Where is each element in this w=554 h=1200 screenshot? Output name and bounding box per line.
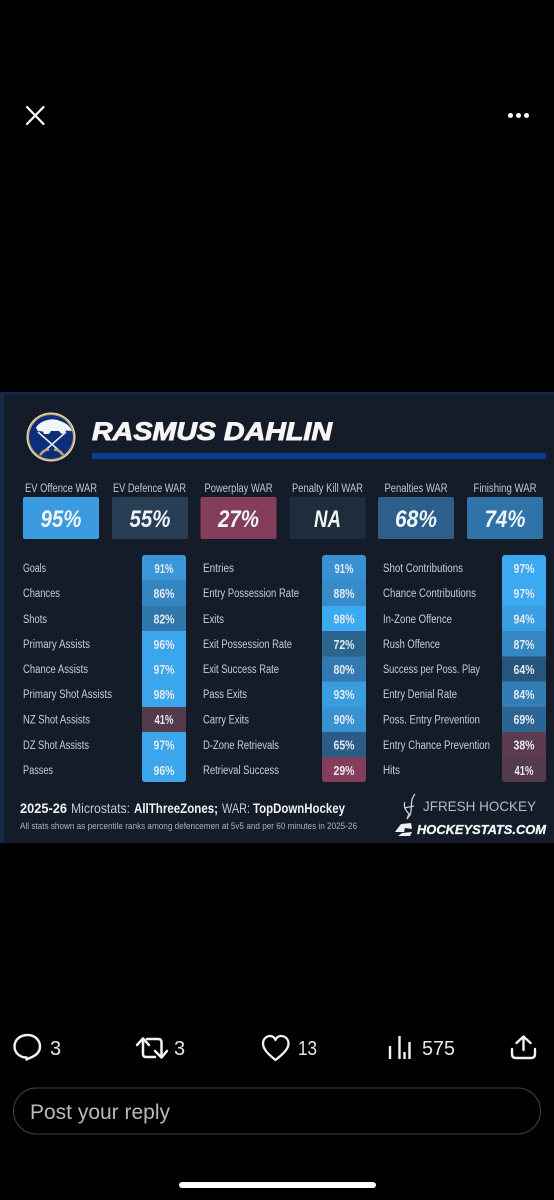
Penalty Kill WAR [290, 483, 366, 539]
stats column 2: Exits [203, 614, 224, 626]
stats column 1: Chances [23, 588, 60, 600]
EV Defence WAR: EV Defence WAR [113, 483, 186, 495]
stats column 3: Chance Contributions [383, 588, 476, 600]
source line: AllThreeZones; [134, 800, 218, 816]
source line: Microstats: [71, 800, 130, 816]
likes [263, 1036, 317, 1060]
stats column 1: 91% [154, 562, 174, 576]
stats column 1: 86% [154, 587, 174, 601]
title: RASMUS DAHLIN [92, 418, 333, 446]
source line: TopDownHockey [253, 800, 345, 816]
EV Defence WAR [112, 483, 188, 539]
EV Offence WAR: 95% [40, 506, 82, 533]
Penalties WAR: Penalties WAR [384, 483, 448, 495]
stats column 3: Hits [383, 765, 400, 777]
Penalties WAR: 68% [395, 506, 437, 533]
source line: WAR: [222, 800, 250, 816]
reply input: Post your reply [30, 1101, 170, 1124]
EV Offence WAR: EV Offence WAR [25, 483, 97, 495]
stats column 2: 91% [334, 562, 354, 576]
footnote: All stats shown as percentile ranks among defencemen at 5v5 and per 60 minutes in 2025-26 [20, 821, 357, 832]
stats column 1: Primary Assists [23, 639, 90, 651]
stats column 3: Entry Denial Rate [383, 689, 457, 701]
stats column 3: 84% [514, 688, 534, 702]
infographic card [0, 392, 554, 843]
stats column 2 [203, 555, 366, 782]
icon: close [27, 107, 44, 124]
Finishing WAR [467, 483, 543, 539]
stats column 1: 97% [154, 663, 174, 677]
stats column 1: 82% [154, 612, 174, 626]
stats column 1: Primary Shot Assists [23, 689, 112, 701]
title underline [92, 453, 546, 459]
stats column 2: Entries [203, 563, 234, 575]
stats column 3: 94% [514, 612, 534, 626]
source line [20, 800, 345, 816]
Powerplay WAR: Powerplay WAR [204, 483, 272, 495]
Finishing WAR: Finishing WAR [474, 483, 536, 495]
Finishing WAR: 74% [484, 506, 526, 533]
reposts: 3 [174, 1038, 185, 1060]
stats column 1: 98% [154, 688, 174, 702]
stats column 2: 98% [334, 612, 354, 626]
stats column 3: Shot Contributions [383, 563, 463, 575]
stats column 3: Entry Chance Prevention [383, 740, 490, 752]
stats column 2: Exit Success Rate [203, 664, 279, 676]
share [512, 1036, 535, 1058]
stats column 2: D-Zone Retrievals [203, 740, 279, 752]
stats column 1: Passes [23, 765, 53, 777]
stats column 3: 41% [514, 764, 534, 778]
icon: more options [508, 113, 529, 118]
stats column 2: Entry Possession Rate [203, 588, 299, 600]
stats column 2: Exit Possession Rate [203, 639, 292, 651]
stats column 3: 87% [514, 638, 534, 652]
stats column 2: Retrieval Success [203, 765, 279, 777]
stats column 1: 96% [154, 764, 174, 778]
replies [14, 1035, 61, 1060]
stats column 2: 65% [334, 738, 354, 752]
reposts [137, 1038, 185, 1060]
stats column 1: 41% [154, 713, 174, 727]
likes: 13 [298, 1038, 317, 1060]
reply input [14, 1088, 540, 1134]
stats column 1: Chance Assists [23, 664, 88, 676]
Penalties WAR [378, 483, 454, 539]
stats column 3: 97% [514, 562, 534, 576]
views [390, 1036, 455, 1060]
stats column 2: 88% [334, 587, 354, 601]
EV Defence WAR: 55% [130, 506, 170, 533]
EV Offence WAR [23, 483, 99, 539]
replies: 3 [50, 1038, 61, 1060]
JFresh logo: JFRESH HOCKEY [423, 798, 537, 814]
stats column 3: 97% [514, 587, 534, 601]
stats column 3: In-Zone Offence [383, 614, 452, 626]
stats column 2: 93% [334, 688, 354, 702]
Powerplay WAR [200, 483, 276, 539]
stats column 3: Rush Offence [383, 639, 440, 651]
source line: 2025-26 [20, 800, 67, 816]
stats column 3 [383, 555, 546, 782]
stats column 2: 90% [334, 713, 354, 727]
stats column 3: Success per Poss. Play [383, 664, 480, 676]
stats column 3: 69% [514, 713, 534, 727]
stats column 1: NZ Shot Assists [23, 714, 90, 726]
views: 575 [422, 1038, 455, 1060]
stats column 1: DZ Shot Assists [23, 740, 89, 752]
action bar [14, 1035, 535, 1060]
Penalty Kill WAR: Penalty Kill WAR [292, 483, 363, 495]
stats column 3: 38% [514, 738, 534, 752]
stats column 3: 64% [514, 663, 534, 677]
stats column 1: 96% [154, 638, 174, 652]
stats column 1: Goals [23, 563, 46, 575]
stats column 2: Pass Exits [203, 689, 247, 701]
stats column 2: 29% [334, 764, 354, 778]
HockeyStats logo: HOCKEYSTATS.COM [417, 823, 547, 837]
stats column 2: 72% [334, 638, 354, 652]
home indicator [179, 1182, 376, 1188]
team logo [26, 412, 76, 462]
stats column 1: Shots [23, 614, 47, 626]
WAR summary row [23, 483, 543, 539]
Powerplay WAR: 27% [217, 506, 259, 533]
stats column 1 [23, 555, 186, 782]
stats column 2: Carry Exits [203, 714, 249, 726]
stats column 1: 97% [154, 738, 174, 752]
JFresh logo [404, 794, 537, 819]
Penalty Kill WAR: NA [314, 506, 341, 533]
stats column 2: 80% [334, 663, 354, 677]
stats column 3: Poss. Entry Prevention [383, 714, 480, 726]
